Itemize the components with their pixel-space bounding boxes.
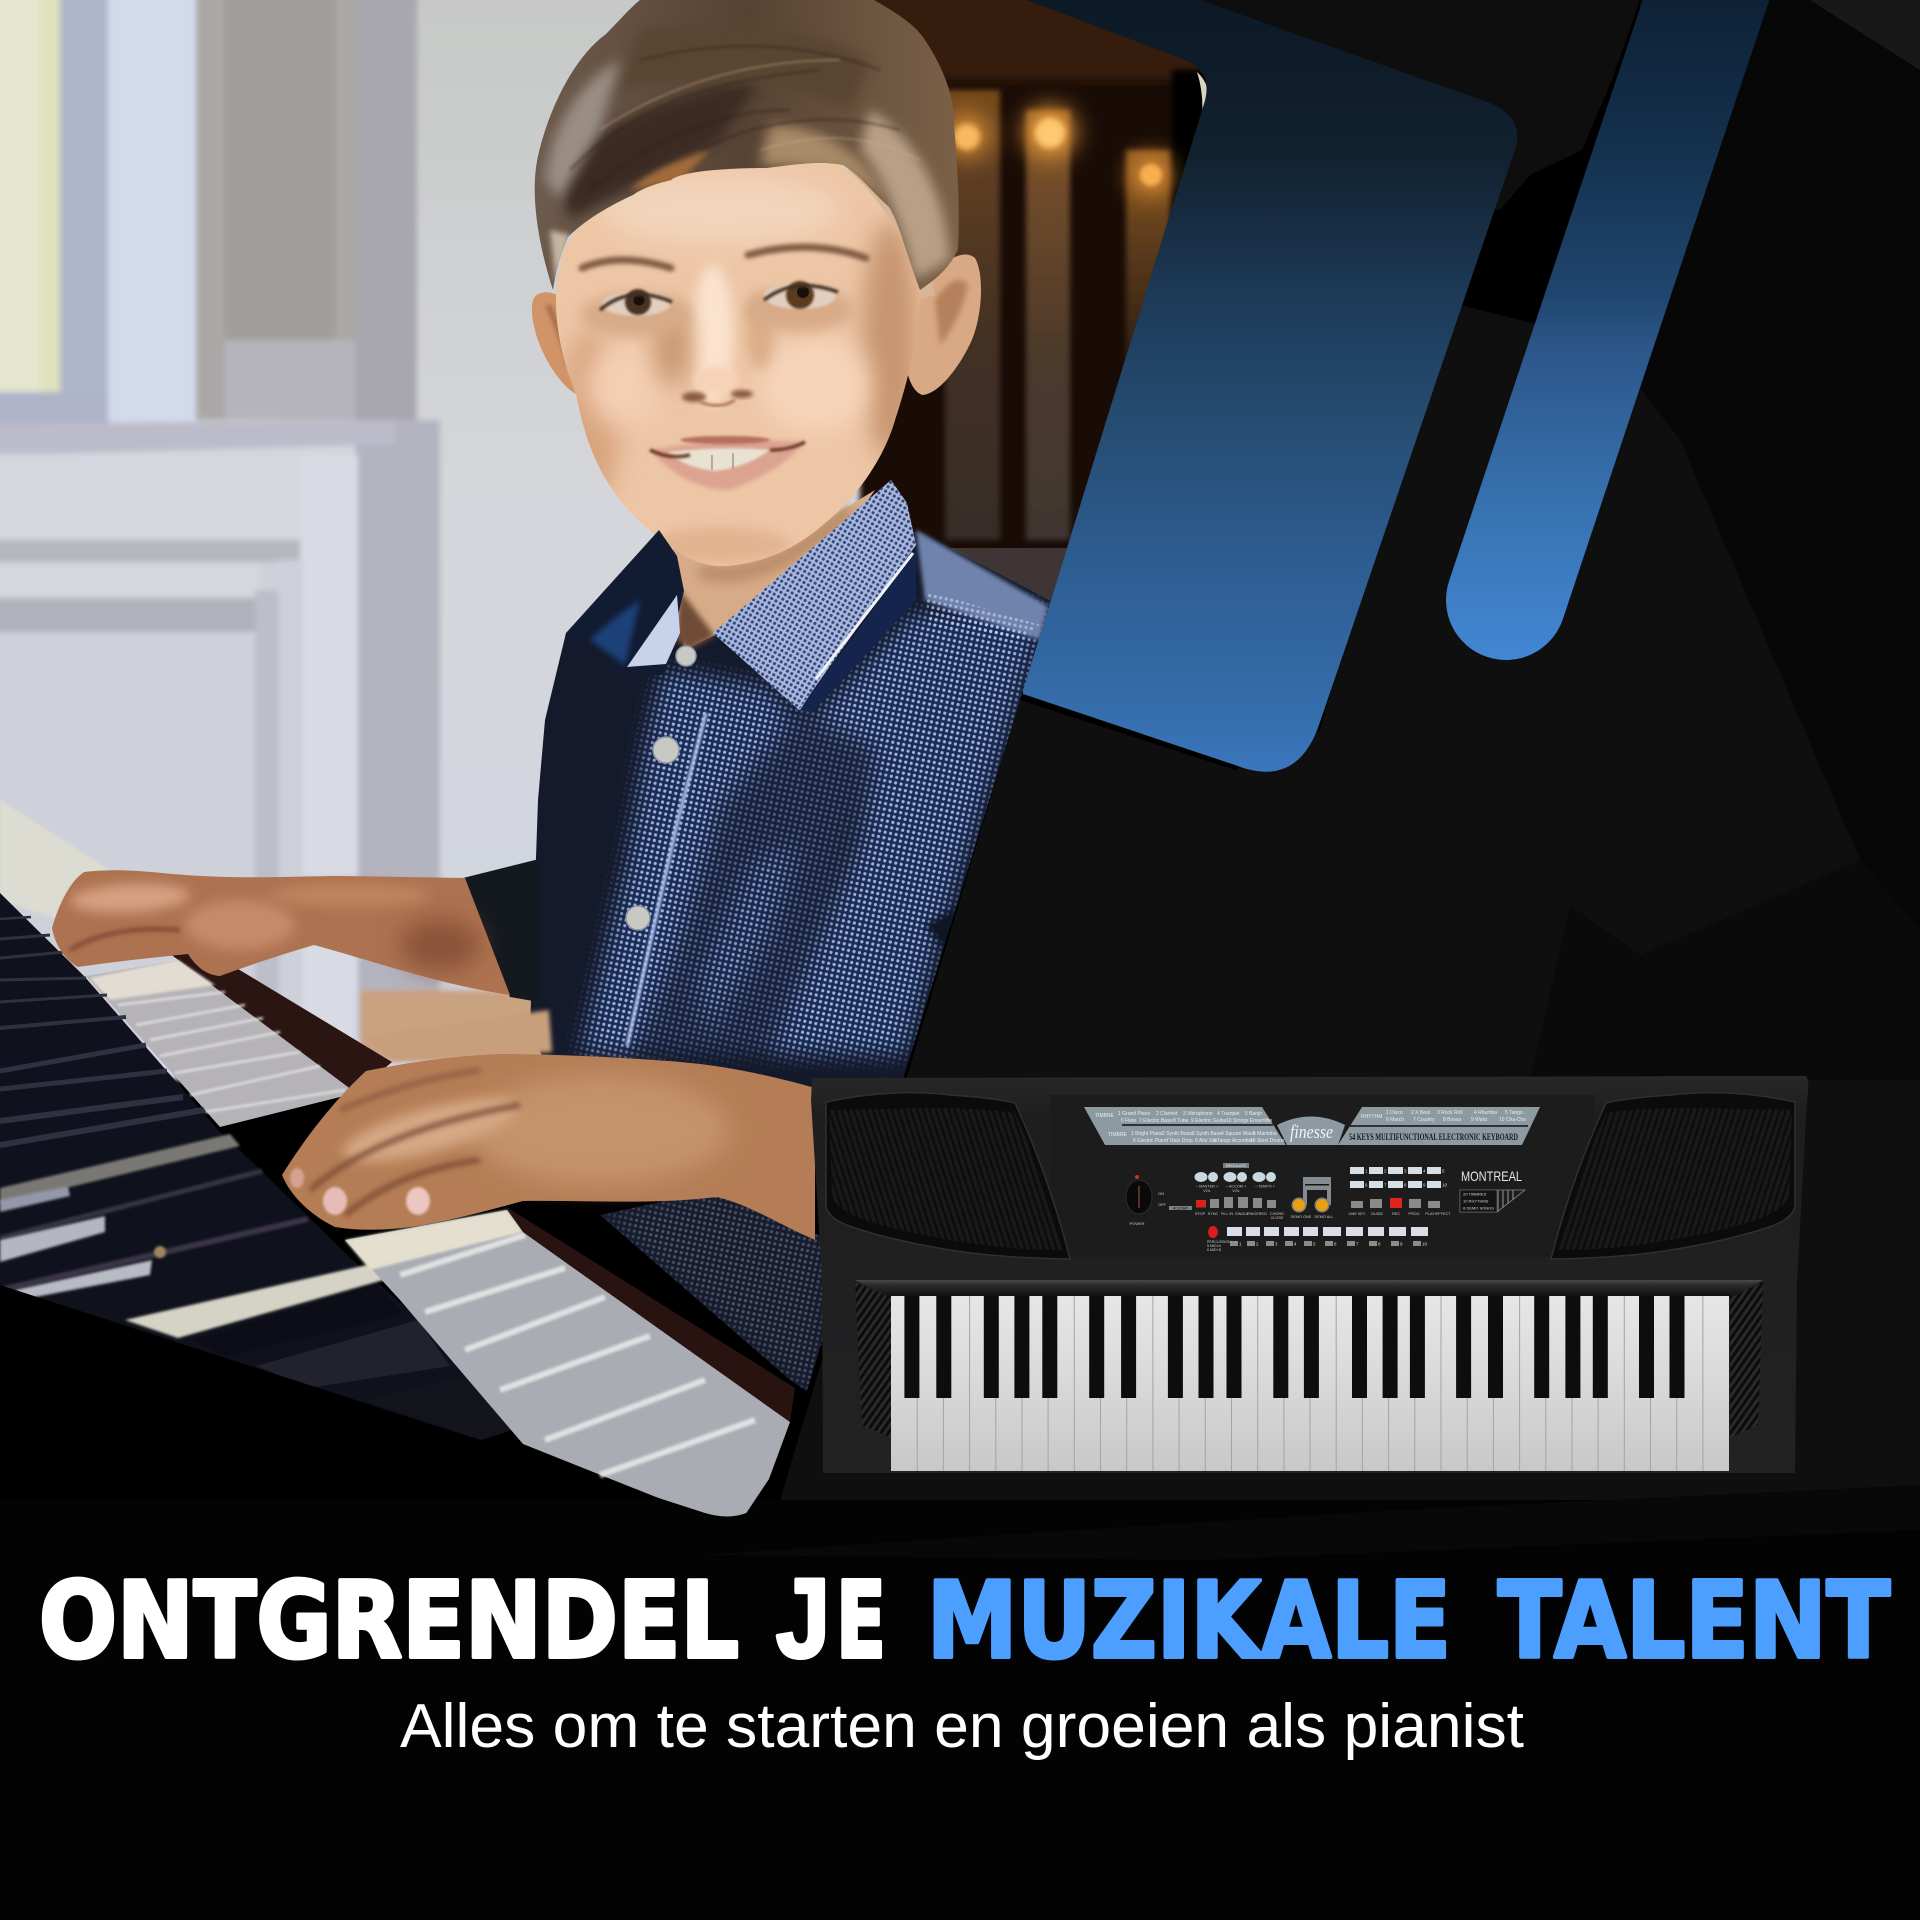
- timbre list label: 9 Tango Accordion: [1213, 1138, 1254, 1144]
- timbre list label: 3 Synth Bass: [1192, 1131, 1222, 1137]
- power knob: OFF: [1158, 1202, 1167, 1207]
- percussion buttons row: [1207, 1226, 1428, 1252]
- timbre number buttons: 5: [1442, 1168, 1445, 1174]
- timbre number buttons: [1350, 1167, 1448, 1188]
- rhythm list and model name label: 4 Rhumba: [1474, 1110, 1497, 1116]
- title: MUZIKALE: MUZIKALE: [927, 1560, 1451, 1682]
- power knob: ON: [1158, 1191, 1164, 1196]
- black keys: [904, 1296, 1684, 1398]
- rhythm list and model name label: 5 Tango: [1505, 1110, 1523, 1116]
- rhythm list and model name label: 54 KEYS MULTIFUNCTIONAL ELECTRONIC KEYBOARD: [1349, 1132, 1518, 1142]
- finesse logo label: [1277, 1116, 1345, 1145]
- timbre list label: 10 Steel Drums: [1250, 1138, 1285, 1144]
- boy: face: [556, 163, 920, 566]
- percussion buttons row: 5 MIDI A: [1207, 1244, 1221, 1248]
- regulate buttons: REGULATE: [1226, 1164, 1247, 1168]
- percussion buttons row: 4: [1294, 1242, 1297, 1246]
- percussion buttons row: 6: [1334, 1242, 1337, 1246]
- record and play buttons: [1349, 1198, 1451, 1216]
- accompaniment buttons: FILL IN: [1221, 1212, 1233, 1216]
- boy: eyes: [600, 281, 838, 316]
- piano: upper white keys: [86, 960, 356, 1127]
- accompaniment buttons: STOP: [1195, 1212, 1206, 1216]
- timbre list label: 4 Trumpet: [1217, 1111, 1240, 1117]
- boy: hair: [520, 0, 970, 300]
- timbre number buttons: 7: [1384, 1182, 1387, 1188]
- timbre list label: 5 Banjo: [1245, 1111, 1262, 1117]
- timbre list label: 7 Rain Drop: [1166, 1138, 1193, 1144]
- timbre list label: 7 Electric Bass: [1139, 1118, 1173, 1124]
- left side grille: [855, 1282, 891, 1438]
- timbre number buttons: 6: [1365, 1182, 1368, 1188]
- boy: shirt body: [530, 530, 1060, 1110]
- photo: boy playing the piano: [0, 0, 1220, 1530]
- timbre number buttons: 4: [1423, 1168, 1426, 1174]
- piano: lower fallboard: [505, 1206, 795, 1422]
- regulate buttons: VOL: [1232, 1189, 1240, 1193]
- piano: upper fallboard: [141, 932, 392, 1093]
- background: wall and window: [0, 0, 860, 1080]
- timbre list label: 6 Flute: [1121, 1118, 1137, 1124]
- piano: lower white keys: [345, 1210, 790, 1530]
- title: [39, 1556, 1890, 1682]
- accompaniment buttons: CLOSE: [1271, 1216, 1284, 1220]
- record and play buttons: PLAY/EFFECT: [1425, 1212, 1451, 1216]
- product: electronic keyboard: [811, 1076, 1808, 1473]
- timbre list label: 2 Synth Brass: [1162, 1131, 1194, 1137]
- feature box: 8 DEMO SONGS: [1463, 1206, 1494, 1210]
- background: room with candles: [850, 0, 1220, 630]
- regulate buttons: [1194, 1163, 1276, 1193]
- accompaniment buttons: SINGLE: [1235, 1212, 1249, 1216]
- timbre list label: 5 Marimba: [1253, 1131, 1277, 1137]
- rhythm list and model name label: 2 X Beat: [1411, 1110, 1431, 1116]
- piano: black keys: [0, 893, 523, 1440]
- record and play buttons: GUIDE: [1371, 1212, 1383, 1216]
- rhythm list and model name label: 1 Disco: [1386, 1110, 1403, 1116]
- right speaker: [1551, 1093, 1795, 1259]
- accompaniment buttons: CHORD: [1270, 1212, 1284, 1216]
- rhythm list and model name label: [1338, 1107, 1540, 1145]
- percussion buttons row: 2: [1256, 1242, 1259, 1246]
- boy: neck: [672, 490, 875, 650]
- title: JE: [776, 1556, 886, 1682]
- rhythm list and model name label: 6 March: [1386, 1117, 1404, 1123]
- timbre list label: 6 Electric Piano: [1133, 1138, 1168, 1144]
- accompaniment buttons: [1195, 1197, 1284, 1220]
- timbre list label: 3 Vibraphone: [1183, 1111, 1213, 1117]
- title: JE: E: [836, 1560, 886, 1682]
- timbre number buttons: 9: [1423, 1182, 1426, 1188]
- boy: temple skin under the hair: [848, 168, 935, 299]
- rhythm list and model name label: 9 Waltz: [1471, 1117, 1488, 1123]
- boy: left collar: [566, 530, 684, 675]
- table and far forearm: [366, 1010, 552, 1062]
- title: ONTGRENDEL: ONTGRENDEL: [39, 1560, 739, 1682]
- feature box: [1460, 1190, 1525, 1212]
- timbre number buttons: 8: [1404, 1182, 1407, 1188]
- percussion buttons row: 3: [1275, 1242, 1278, 1246]
- title: JE: J: [776, 1556, 830, 1681]
- accompaniment buttons: FINGERED: [1247, 1212, 1267, 1216]
- boy: dark sleeve: [463, 859, 539, 1002]
- timbre number buttons: 1: [1365, 1168, 1368, 1174]
- rhythm list and model name label: 3 Rock Roll: [1437, 1110, 1463, 1116]
- piano: off-white ledge: [0, 800, 150, 950]
- boy: nose: [682, 366, 753, 406]
- feature box: 20 TIMBRES: [1463, 1192, 1487, 1196]
- boy: left ear: [532, 292, 576, 394]
- blue diagonal panel: [1023, 0, 1517, 772]
- timbre list label: 4 Square Wave: [1221, 1131, 1255, 1137]
- rhythm list and model name label: 10 Cha-Cha: [1499, 1117, 1526, 1123]
- accomp tag: ACCOMP: [1173, 1206, 1189, 1210]
- percussion buttons row: 1: [1239, 1242, 1242, 1246]
- feature box: 10 RHYTHMS: [1463, 1198, 1489, 1204]
- regulate buttons: − TEMPO +: [1255, 1184, 1276, 1188]
- timbre list label: 1 Grand Piano: [1118, 1111, 1150, 1117]
- percussion buttons row: 8: [1378, 1242, 1381, 1246]
- accomp tag: [1169, 1206, 1192, 1210]
- timbre list label: 8 Alto Sax: [1195, 1138, 1218, 1144]
- boy: right collar: [713, 480, 916, 712]
- percussion buttons row: PERCUSSION: [1207, 1240, 1231, 1244]
- timbre list label: TIMBRE: [1095, 1113, 1115, 1119]
- boy: lower shirt area: [600, 1197, 822, 1391]
- percussion buttons row: 5: [1313, 1242, 1316, 1246]
- subtitle: Alles om te starten en groeien als pianist: [400, 1692, 1524, 1761]
- percussion buttons row: 10: [1422, 1242, 1428, 1246]
- rhythm list and model name label: 7 Country: [1413, 1117, 1435, 1123]
- boy: lower hand on the keys: [282, 1054, 815, 1240]
- boy: white undershirt: [627, 595, 680, 667]
- timbre list label: 1 Bright Piano: [1131, 1131, 1163, 1137]
- power knob: [1126, 1175, 1167, 1226]
- music note demo buttons: [1291, 1177, 1334, 1219]
- left speaker: [826, 1093, 1070, 1259]
- timbre list label: 9 Electric Guitar: [1191, 1118, 1227, 1124]
- rhythm list and model name label: RHYTHM: [1361, 1114, 1382, 1120]
- model name MONTREAL: MONTREAL: [1461, 1168, 1522, 1184]
- record and play buttons: PROG: [1408, 1212, 1420, 1216]
- record and play buttons: ONE KEY: [1349, 1212, 1366, 1216]
- regulate buttons: − ACCOM +: [1226, 1184, 1247, 1188]
- boy: eyebrows: [582, 247, 866, 268]
- blue diagonal rounded bar: [1506, 0, 1726, 600]
- boy: smile: [650, 436, 805, 490]
- right side grille: [1730, 1282, 1763, 1438]
- keyboard body: [811, 1076, 1808, 1473]
- timbre number buttons: 10: [1442, 1182, 1448, 1188]
- boy: upper hand on the keys: [52, 870, 510, 995]
- percussion buttons row: 9: [1400, 1242, 1403, 1246]
- regulate buttons: − MASTER +: [1196, 1184, 1219, 1188]
- keyboard control panel background: [1050, 1095, 1594, 1257]
- percussion buttons row: 6 MIDI B: [1207, 1248, 1222, 1252]
- timbre list label: 10 Strings Ensemble: [1226, 1118, 1272, 1124]
- timbre list label: TIMBRE: [1108, 1132, 1128, 1138]
- music note demo buttons: DEMO ONE: [1291, 1215, 1312, 1219]
- regulate buttons: VOL: [1203, 1189, 1211, 1193]
- accompaniment buttons: SYNC: [1208, 1212, 1219, 1216]
- record and play buttons: REC: [1392, 1212, 1400, 1216]
- rhythm list and model name label: 8 Bossa: [1443, 1117, 1461, 1123]
- white keys: [891, 1296, 1729, 1471]
- percussion buttons row: 7: [1356, 1242, 1359, 1246]
- music note demo buttons: DEMO ALL: [1314, 1215, 1334, 1219]
- power knob: POWER: [1129, 1221, 1145, 1226]
- timbre number buttons: 3: [1404, 1168, 1407, 1174]
- boy: right ear: [905, 254, 981, 395]
- timbre list label: 2 Clarinet: [1156, 1111, 1178, 1117]
- keybed frame: [855, 1280, 1763, 1298]
- finesse logo label: finesse: [1290, 1122, 1333, 1143]
- boy: shirt buttons: [626, 646, 696, 930]
- timbre list label: 8 Tuba: [1173, 1118, 1189, 1124]
- timbre number buttons: 2: [1384, 1168, 1387, 1174]
- timbre list label: [1084, 1107, 1286, 1145]
